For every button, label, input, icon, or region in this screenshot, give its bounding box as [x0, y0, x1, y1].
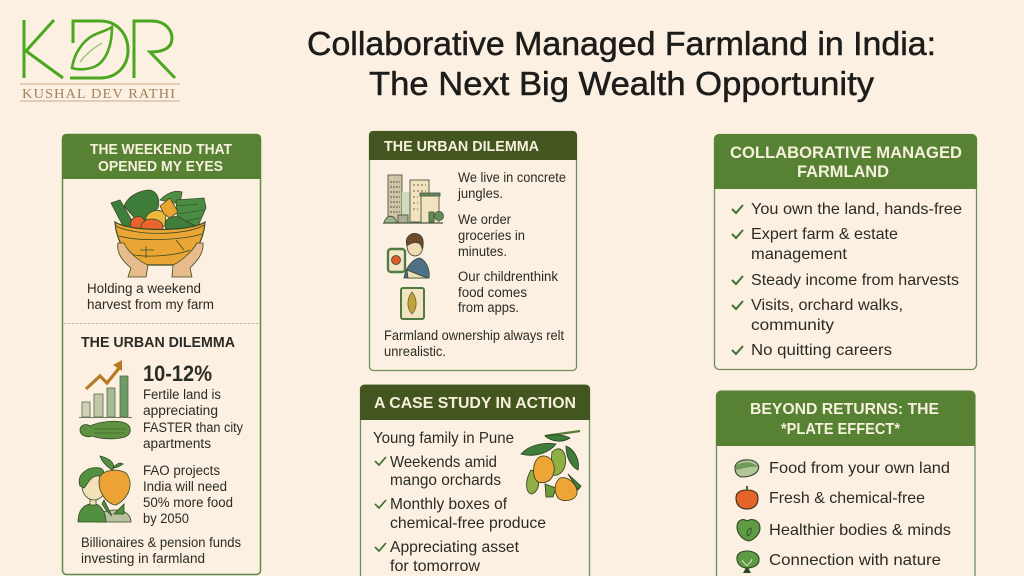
text: FAO projection: FAO projects	[143, 463, 220, 478]
panel header: collaborative: COLLABORATIVE MANAGED	[730, 143, 962, 162]
panel header: case study: A CASE STUDY IN ACTION	[374, 395, 576, 412]
list: case study points: mango orchards	[390, 472, 501, 489]
panel header: plate effect: *PLATE EFFECT*	[781, 421, 901, 438]
list: benefits: No quitting careers	[751, 342, 892, 359]
panel header: case study	[360, 385, 590, 420]
panel header: collaborative	[714, 134, 977, 189]
text: harvest caption: Holding a weekend	[87, 281, 201, 296]
list: case study points: Monthly boxes of	[390, 496, 508, 513]
logo: KDR Kushal Dev Rathi: KUSHAL DEV RATHI	[22, 87, 176, 102]
text: FAO projection: by 2050	[143, 511, 189, 526]
list: case study points: chemical-free produce	[390, 515, 546, 532]
text: fertile land: FASTER than city	[143, 420, 243, 435]
panel header: urban dilemma	[369, 131, 577, 160]
text: farmland ownership: unrealistic.	[384, 344, 446, 359]
list: benefits: Steady income from harvests	[751, 272, 959, 289]
list: case study points	[375, 454, 546, 575]
icon: phone with wheat leaf	[401, 288, 424, 319]
text: urban dilemma points: Our childrenthink	[458, 269, 558, 284]
panel: collaborative managed farmland	[714, 134, 977, 370]
list: case study points: Weekends amid	[390, 454, 497, 471]
title	[307, 25, 936, 102]
text: urban dilemma points	[457, 170, 566, 315]
icon: child with fruit	[78, 456, 131, 522]
panel header: weekend: OPENED MY EYES	[98, 158, 223, 175]
text: young family: Young family in Pune	[373, 430, 514, 447]
panel: beyond returns, the plate effect	[716, 391, 975, 576]
panel header: plate effect	[716, 391, 975, 446]
panel header: weekend	[62, 134, 261, 179]
icon: green heart	[737, 520, 760, 541]
panel: a case study in action	[360, 385, 590, 576]
icon: mango branch	[521, 431, 581, 501]
text: FAO projection: India will need	[143, 479, 227, 494]
panel header: urban dilemma: THE URBAN DILEMMA	[384, 139, 540, 155]
icon: person with grocery tablet	[388, 234, 429, 278]
icon: city buildings	[383, 175, 444, 223]
text: urban dilemma points: food comes	[458, 285, 527, 300]
text: urban dilemma points: We live in concrete	[458, 170, 566, 185]
text: urban dilemma points: minutes.	[458, 244, 507, 259]
list: plate effect: Food from your own land	[769, 460, 950, 477]
panel: the weekend that opened my eyes	[62, 134, 261, 574]
panel header: plate effect: BEYOND RETURNS: THE	[750, 401, 939, 418]
stat: 10-12%: 10-12%	[143, 361, 212, 386]
text: urban dilemma points: groceries in	[458, 228, 525, 243]
text: urban dilemma points: jungles.	[457, 186, 503, 201]
text: farmland ownership	[384, 328, 564, 359]
panel header: weekend: THE WEEKEND THAT	[90, 141, 232, 158]
panel: the urban dilemma	[369, 131, 577, 370]
icon: tomato	[736, 486, 758, 509]
text: urban dilemma points: We order	[458, 212, 511, 227]
list: plate effect: Healthier bodies & minds	[769, 522, 951, 539]
text: FAO projection: 50% more food	[143, 495, 233, 510]
title: The Next Big Wealth Opportunity	[369, 65, 875, 102]
icon: food leaf	[735, 460, 759, 477]
text: FAO projection	[143, 463, 233, 526]
list: case study points: Appreciating asset	[390, 539, 520, 556]
list: benefits	[732, 201, 962, 359]
icon: rising bar chart with arrow and gourd	[79, 360, 132, 439]
title: Collaborative Managed Farmland in India:	[307, 25, 936, 62]
logo: KDR Kushal Dev Rathi	[20, 20, 180, 102]
heading: the urban dilemma: THE URBAN DILEMMA	[81, 334, 235, 351]
icon: tree	[737, 551, 759, 573]
list: benefits: Visits, orchard walks,	[751, 297, 903, 314]
list: benefits: You own the land, hands-free	[751, 201, 962, 218]
text: fertile land	[143, 387, 243, 451]
text: urban dilemma points: from apps.	[458, 300, 519, 315]
text: fertile land: appreciating	[143, 403, 218, 418]
text: harvest caption: harvest from my farm	[87, 297, 214, 312]
list: plate effect: Fresh & chemical-free	[769, 490, 925, 507]
panel header: collaborative: FARMLAND	[797, 162, 889, 181]
list: benefits: community	[751, 317, 834, 334]
text: farmland ownership: Farmland ownership always relt	[384, 328, 564, 343]
list: case study points: for tomorrow	[390, 558, 480, 575]
list: plate effect	[769, 460, 951, 569]
text: billionaires: investing in farmland	[81, 551, 205, 566]
text: billionaires: Billionaires & pension funds	[81, 535, 241, 550]
list: benefits: Expert farm & estate	[751, 226, 898, 243]
list: plate effect: Connection with nature	[769, 552, 941, 569]
text: harvest caption	[87, 281, 214, 312]
text: fertile land: apartments	[143, 436, 211, 451]
text: billionaires	[81, 535, 241, 566]
list: benefits: management	[751, 246, 848, 263]
icon: harvest basket held in hands	[111, 190, 206, 277]
text: fertile land: Fertile land is	[143, 387, 221, 402]
